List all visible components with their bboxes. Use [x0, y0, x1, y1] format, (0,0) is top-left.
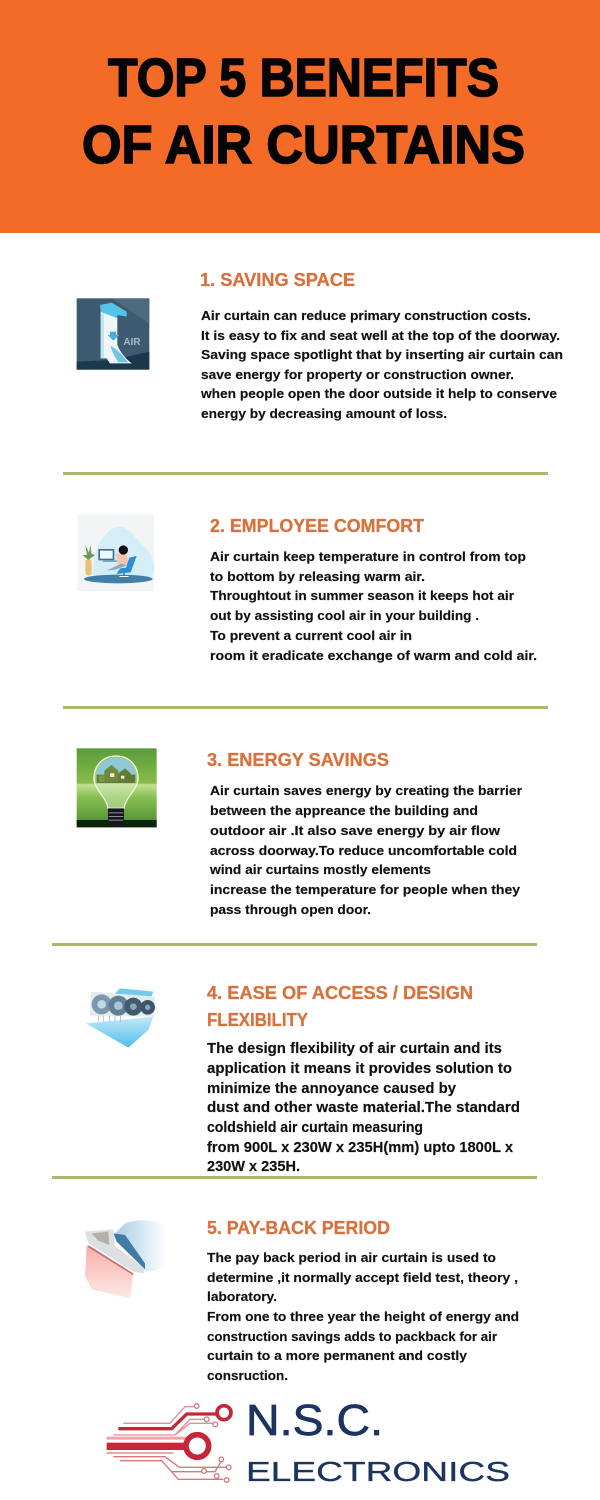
text block: determine ,it normally accept field test, theory ,	[207, 1270, 518, 1285]
text block: laboratory.	[207, 1289, 277, 1304]
text block: coldshield air curtain measuring	[207, 1120, 423, 1136]
wordmark: ELECTRONICS	[246, 1456, 510, 1487]
text block: out by assisting cool air in your building .	[210, 608, 479, 623]
text block: across doorway.To reduce uncomfortable cold	[210, 843, 517, 858]
text block: outdoor air .It also save energy by air flow	[210, 823, 501, 838]
text block: between the appreance the building and	[210, 803, 478, 818]
text block	[207, 1250, 519, 1383]
logo: N.S.C. Electronics	[107, 1396, 510, 1487]
text block: wind air curtains mostly elements	[209, 862, 431, 877]
icon: air curtain over doorway	[77, 298, 149, 370]
text block	[210, 549, 537, 663]
text block: application it means it provides solution to	[207, 1061, 512, 1077]
panel: pay-back period	[85, 1218, 519, 1383]
text block: The pay back period in air curtain is used to	[207, 1250, 496, 1265]
text block: Air curtain can reduce primary construction costs.	[201, 308, 531, 323]
panel: energy savings	[77, 748, 522, 917]
text block: Air curtain saves energy by creating the barrier	[210, 783, 522, 798]
text block: From one to three year the height of energy and	[207, 1309, 519, 1324]
panel: ease of access	[86, 983, 520, 1175]
text block: Air curtain keep temperature in control from top	[210, 549, 526, 564]
panel: employee comfort	[77, 514, 537, 663]
text block: To prevent a current cool air in	[210, 628, 412, 643]
title banner: OF AIR CURTAINS	[82, 115, 525, 175]
text block: Saving space spotlight that by inserting air curtain can	[201, 347, 563, 362]
text block: The design flexibility of air curtain and its	[207, 1041, 502, 1057]
panel: saving space	[77, 270, 563, 421]
wordmark	[246, 1396, 510, 1487]
text block: when people open the door outside it help to conserve	[200, 386, 557, 401]
text block	[207, 1041, 520, 1175]
text block: from 900L x 230W x 235H(mm) upto 1800L x	[207, 1140, 513, 1156]
text block: to bottom by releasing warm air.	[210, 569, 425, 584]
icon: person at desk	[77, 514, 154, 591]
heading: FLEXIBILITY	[207, 1010, 308, 1030]
text block: increase the temperature for people when they	[210, 882, 521, 897]
heading	[207, 983, 473, 1030]
title banner	[0, 0, 600, 233]
heading: 4. EASE OF ACCESS / DESIGN	[207, 983, 473, 1003]
icon: green light bulb with houses	[77, 748, 157, 827]
title banner: TOP 5 BENEFITS	[108, 48, 499, 108]
text block: Throughtout in summer season it keeps hot air	[210, 588, 514, 603]
text block: room it eradicate exchange of warm and cold air.	[210, 648, 537, 663]
text block	[200, 308, 563, 421]
text block: minimize the annoyance caused by	[207, 1081, 456, 1097]
text block: pass through open door.	[210, 902, 371, 917]
text block: energy by decreasing amount of loss.	[201, 406, 447, 421]
text block: construction savings adds to packback for air	[207, 1329, 497, 1344]
heading: 5. PAY-BACK PERIOD	[207, 1218, 390, 1238]
text block: dust and other waste material.The standard	[207, 1100, 520, 1116]
heading: 2. EMPLOYEE COMFORT	[210, 516, 424, 536]
icon: air curtain unit with fans	[86, 988, 155, 1048]
heading: 1. SAVING SPACE	[200, 270, 355, 290]
wordmark: N.S.C.	[246, 1396, 383, 1445]
text block: 230W x 235H.	[207, 1159, 300, 1175]
icon: red circuit traces	[107, 1404, 231, 1482]
heading: 3. ENERGY SAVINGS	[207, 750, 389, 770]
icon: air curtain over doorway: AIR	[123, 337, 141, 348]
icon: ceiling air curtain with red and blue air	[85, 1220, 167, 1298]
text block: consruction.	[207, 1368, 288, 1383]
text block: save energy for property or construction owner.	[201, 367, 514, 382]
text block: curtain to a more permanent and costly	[207, 1348, 468, 1363]
text block: It is easy to fix and seat well at the top of the doorway.	[201, 328, 560, 343]
text block	[209, 783, 522, 917]
